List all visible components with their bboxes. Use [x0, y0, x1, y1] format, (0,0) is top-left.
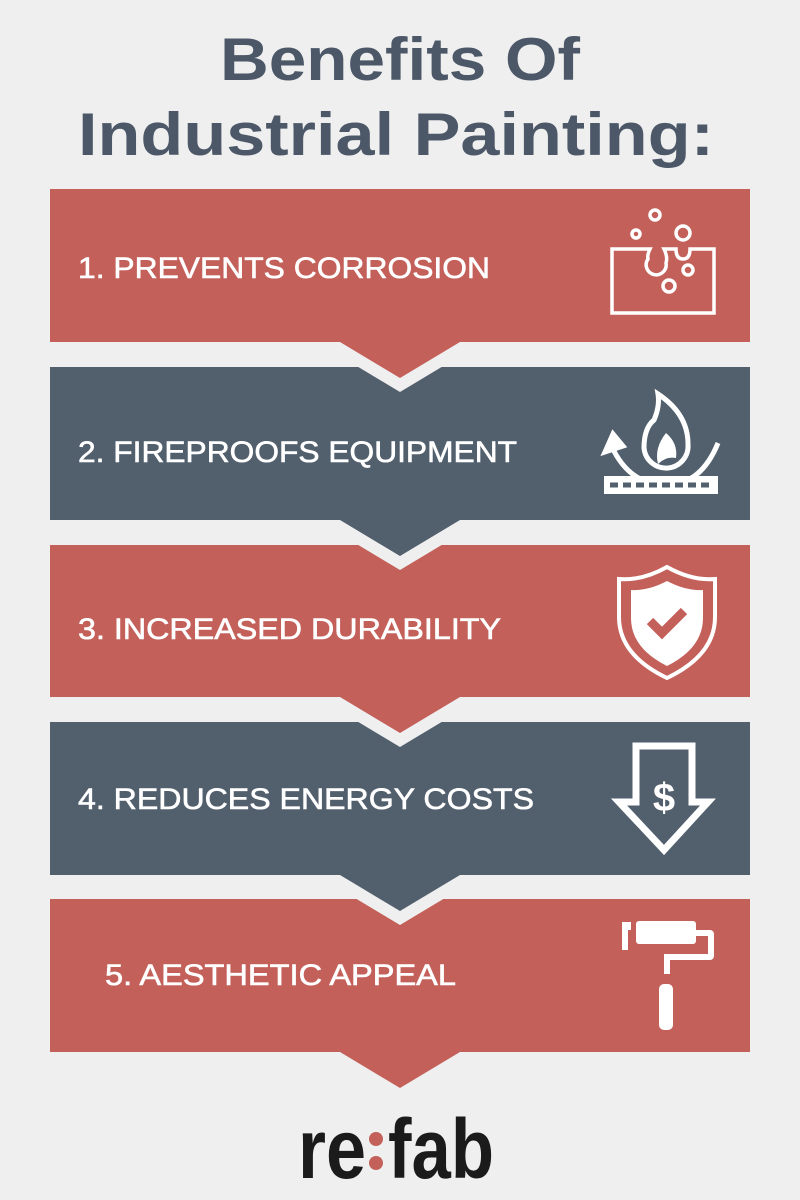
title: Benefits Of [220, 26, 581, 93]
band 2: fireproofs equipment [50, 367, 750, 556]
logo: re:fab: re [298, 1102, 366, 1196]
band 4: reduces energy costs [50, 722, 750, 911]
icon: corrosion [612, 210, 714, 313]
icon: dollar down arrow [619, 746, 708, 850]
band 5: aesthetic appeal [50, 899, 750, 1088]
icon: shield check [619, 567, 715, 678]
band 3: increased durability [50, 545, 750, 733]
title [78, 26, 714, 168]
icon: fire shield [604, 394, 718, 494]
title: Industrial Painting: [78, 101, 714, 168]
band 4: reduces energy costs: 4. REDUCES ENERGY COSTS [78, 783, 534, 816]
band 1: prevents corrosion [50, 189, 750, 378]
band 3: increased durability: 3. INCREASED DURABILITY [78, 613, 501, 646]
logo: re:fab: fab [388, 1102, 494, 1196]
band 2: fireproofs equipment: 2. FIREPROOFS EQUIPMENT [78, 436, 517, 469]
band 5: aesthetic appeal: 5. AESTHETIC APPEAL [105, 959, 456, 992]
band 1: prevents corrosion: 1. PREVENTS CORROSION [78, 252, 490, 285]
icon: paint roller [622, 921, 714, 1030]
icon: dollar down arrow: $ [653, 776, 675, 820]
logo: re:fab [298, 1102, 494, 1196]
